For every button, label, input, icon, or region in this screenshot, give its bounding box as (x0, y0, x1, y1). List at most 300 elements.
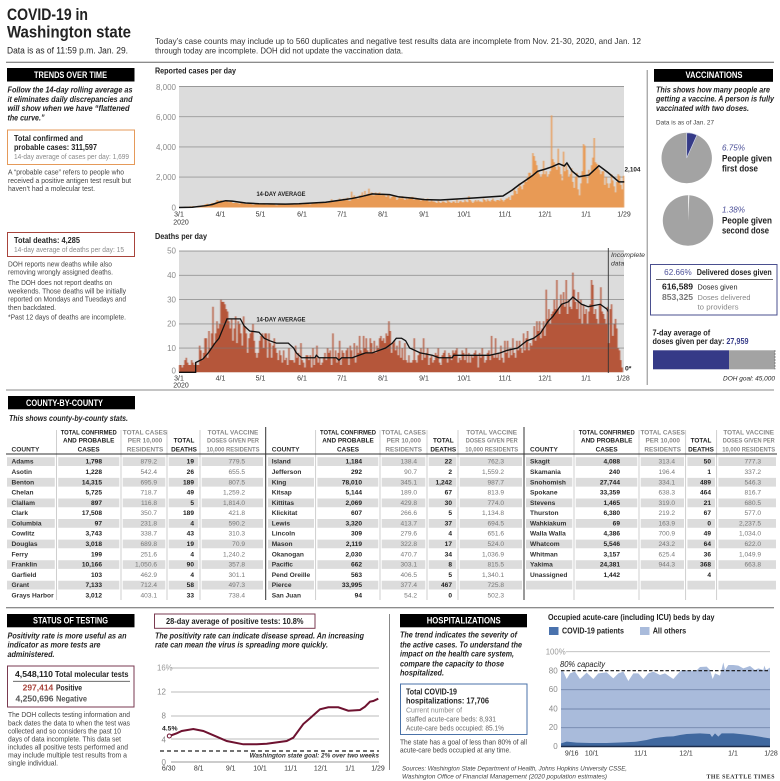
table rows: San Juan (272, 592, 301, 600)
table header: COUNTY (530, 446, 558, 453)
y axis: beds: 40 (549, 704, 558, 713)
table rows: Skagit (530, 459, 551, 466)
table header: TOTAL CONFIRMED (579, 430, 635, 437)
table rows: 651.6 (487, 531, 504, 538)
table rows: 470.7 (400, 551, 417, 558)
callout: total deaths (8, 232, 134, 256)
table rows: 319.0 (658, 500, 675, 507)
table rows: 725.8 (487, 582, 504, 589)
title: Washington state (7, 24, 131, 42)
table rows: 14,315 (82, 479, 102, 486)
heading: trends over time: TRENDS OVER TIME (34, 70, 107, 80)
callout: delivered doses: Doses delivered (698, 293, 750, 302)
note: capacity goal (400, 738, 527, 755)
pie: second dose (663, 195, 713, 246)
y axis: deaths: 10 (167, 344, 177, 353)
table rows: 1,242 (435, 479, 452, 486)
callout: total cases: probable cases: 311,597 (14, 143, 97, 152)
table rows: 1,034.0 (739, 531, 761, 538)
y axis: beds: 20 (549, 723, 558, 732)
table rows: 2,119 (346, 541, 362, 548)
label: second dose: 1.38% (722, 206, 745, 215)
table rows: 1,340.1 (482, 572, 504, 579)
capacity line (561, 670, 770, 672)
table rows: 64 (704, 541, 711, 548)
top note: through today are incomplete. DOH did not update the vaccination data. (155, 46, 403, 56)
table header: TOTAL CASES (123, 430, 168, 437)
chart title: cases: Reported cases per day (155, 66, 236, 76)
table rows: 5,144 (345, 490, 362, 497)
x axis: positivity: 8/1 (194, 766, 204, 773)
heading: county-by-county (8, 396, 135, 409)
table header: PER 10,000 (645, 438, 680, 445)
table rows: Spokane (530, 490, 558, 497)
table rows: 292 (351, 469, 362, 476)
y axis: cases: 8,000 (156, 83, 177, 92)
table rows: 309 (351, 531, 362, 538)
table rows: 27,744 (600, 479, 620, 486)
positivity description (155, 631, 364, 650)
table rows: 4 (448, 531, 452, 538)
table rows: 310.3 (228, 531, 245, 538)
table rows: 1,559.2 (482, 469, 504, 476)
label: first dose: People given (722, 154, 772, 164)
table rows: Walla Walla (530, 531, 566, 538)
table rows: 700.9 (658, 531, 675, 538)
table rows: 577.0 (744, 510, 761, 517)
label: 7-day doses average (652, 329, 749, 346)
y axis: positivity: 16% (157, 664, 173, 673)
table rows (272, 459, 504, 600)
y axis: deaths (167, 247, 177, 376)
x axis: positivity: 11/1 (284, 766, 297, 773)
table rows: 5,546 (603, 541, 620, 548)
data date: Data is as of Jan. 27 (656, 119, 714, 126)
table header: TOTAL (174, 438, 194, 445)
table rows: 1,050.6 (135, 562, 157, 569)
table rows: 1,465 (603, 500, 620, 507)
table rows: 680.5 (744, 500, 761, 507)
table rows: 4 (190, 551, 194, 558)
table rows: Lewis (272, 520, 290, 528)
table rows: 813.9 (487, 490, 504, 497)
table rows: 33,995 (342, 582, 362, 589)
label: first dose: 6.75% (722, 144, 745, 153)
table rows: 542.4 (140, 469, 157, 476)
table rows: 231.8 (140, 520, 157, 528)
table rows: 816.7 (744, 490, 761, 497)
x axis: deaths: 10/1 (457, 376, 471, 383)
table rows: 694.5 (487, 520, 504, 528)
label: second dose (722, 206, 772, 235)
heading: hospitalizations (400, 614, 527, 627)
label: 7-day doses average: 7-day average of (652, 329, 711, 338)
table rows: 777.3 (744, 459, 761, 466)
table rows: 879.2 (140, 459, 157, 466)
table rows: 429.8 (400, 500, 417, 507)
intro text: the curve.” (8, 114, 45, 122)
callout: total hospitalizations: Acute-care beds occupied: 85.1% (406, 725, 504, 732)
table rows: 334.1 (658, 479, 675, 486)
progress bar: doses vs goal (653, 350, 775, 369)
y axis: positivity: 4 (162, 735, 167, 744)
heading: status of testing (7, 614, 134, 627)
table rows: Stevens (530, 500, 556, 507)
table rows: 944.3 (658, 562, 675, 569)
y axis: deaths: 0 (172, 366, 177, 376)
table rows: 17,508 (82, 510, 102, 517)
x axis: cases: 7/1 (337, 212, 347, 219)
intro text (8, 86, 133, 122)
callout: delivered doses: Delivered doses given (697, 268, 772, 277)
y axis: deaths: 40 (167, 271, 177, 280)
table rows: 240 (609, 469, 620, 476)
table: counties Island to San Juan (272, 430, 519, 600)
x axis: beds: 1/1 (728, 750, 738, 757)
table rows: 1,184 (345, 459, 362, 466)
table rows: 368 (700, 562, 711, 569)
table rows: 50 (704, 459, 711, 466)
table rows: 1,240.2 (223, 551, 245, 558)
table rows: 219.2 (658, 510, 675, 517)
table rows: 607 (351, 510, 362, 517)
note: test data: includes all positive tests performed and (8, 742, 128, 751)
callout: molecular tests: Positive (56, 684, 83, 693)
table header (12, 430, 260, 453)
table header: TOTAL CASES (641, 430, 686, 437)
table rows: 357.8 (228, 562, 245, 569)
table rows: 22 (445, 459, 452, 466)
panel: vaccinations (650, 69, 777, 383)
label: latest deaths value: 0* (625, 366, 632, 373)
x axis: positivity: 9/1 (226, 766, 236, 773)
annotation: incomplete data: data (611, 261, 624, 268)
table rows: 199 (91, 551, 102, 558)
intro text: indicator as more tests are (8, 640, 101, 650)
table rows: 1,049.9 (739, 551, 761, 558)
table rows: 97 (95, 520, 102, 528)
x axis: positivity: 6/30 (162, 766, 176, 773)
table header: PER 10,000 (128, 438, 163, 445)
table header: CASES (78, 446, 100, 453)
table rows: 638.3 (658, 490, 675, 497)
table header: AND PROBABLE (63, 438, 115, 445)
intro text (400, 631, 522, 677)
table header: TOTAL (691, 438, 711, 445)
table header: DEATHS (688, 446, 715, 453)
chart: reported cases per day (155, 66, 641, 227)
table background bands (6, 427, 777, 600)
table rows: 7,133 (85, 582, 102, 589)
table rows: 464 (700, 490, 711, 497)
line: deaths 14-day average (179, 297, 608, 372)
table rows: 21 (704, 500, 711, 507)
y axis: beds (546, 647, 566, 751)
y axis: deaths: 50 (167, 247, 177, 256)
table rows: Ferry (12, 551, 28, 558)
x axis: beds: 12/1 (679, 750, 693, 757)
y axis: beds: 80 (549, 666, 558, 675)
capacity label: 80% capacity (560, 660, 606, 669)
note: probable case: haven’t had a molecular test. (8, 184, 95, 193)
bars: daily cases (179, 115, 624, 208)
callout: total hospitalizations: hospitalizations: 17,706 (406, 697, 490, 706)
x axis: deaths: 9/1 (419, 376, 429, 383)
intro text: the active cases. To understand the (400, 640, 522, 649)
table rows: 662 (351, 562, 362, 569)
positivity description: The positivity rate can indicate disease spread. An increasing (155, 631, 364, 640)
callout: total cases: Total confirmed and (14, 134, 83, 143)
plot background: deaths (179, 251, 624, 372)
table rows: 279.6 (400, 531, 417, 538)
table rows: Lincoln (272, 531, 295, 538)
table rows: 5 (190, 500, 194, 507)
table rows: 54.2 (404, 592, 417, 600)
x axis: deaths: 12/1 (538, 376, 552, 383)
table header: TOTAL (433, 438, 454, 445)
callout: total cases: 14-day average of cases per day: 1,699 (14, 154, 129, 161)
x axis: deaths: 5/1 (256, 376, 265, 383)
table rows: 5,725 (85, 490, 102, 497)
table rows: 26 (187, 469, 194, 476)
intro text: administered. (8, 650, 54, 659)
label: first dose (722, 144, 772, 174)
table rows: 762.3 (487, 459, 504, 466)
table rows: Asotin (12, 469, 32, 476)
table rows: 116.8 (141, 500, 157, 507)
callout: total hospitalizations: staffed acute-care beds: 8,931 (406, 716, 496, 723)
table header: DEATHS (171, 446, 198, 453)
table rows: Skamania (530, 469, 561, 476)
table rows: 467 (441, 582, 452, 589)
note: test data: single individual. (8, 759, 58, 768)
y axis: positivity: 12 (157, 688, 167, 697)
intro text: This shows county-by-county stats. (9, 414, 128, 423)
table rows: 590.2 (228, 520, 245, 528)
table rows: Whatcom (530, 541, 560, 548)
y axis: positivity: 8 (162, 712, 167, 720)
table rows: 303.1 (400, 562, 417, 569)
table rows: 189.0 (400, 490, 417, 497)
table header: 10,000 RESIDENTS (722, 446, 776, 453)
x axis: cases: 1/1 (581, 212, 591, 219)
table rows: 774.0 (487, 500, 504, 507)
table rows: 421.8 (228, 510, 245, 517)
table header: COUNTY (12, 446, 40, 453)
table rows: Jefferson (272, 469, 301, 476)
table rows: 24,381 (600, 562, 620, 569)
note: deaths reporting (7, 259, 126, 322)
intro text: impact on the health care system, (400, 650, 514, 659)
pie: first dose (662, 133, 712, 183)
table rows: Pierce (272, 582, 292, 589)
table rows: 489 (700, 479, 711, 486)
table rows: Columbia (12, 520, 42, 528)
table rows: 1,228 (85, 469, 102, 476)
table rows: 4,088 (603, 459, 620, 466)
callout: molecular tests: Negative (56, 694, 88, 703)
note: deaths reporting: *Past 12 days of deaths are incomplete. (8, 313, 126, 322)
table rows: Chelan (12, 490, 33, 497)
note: test data: collected and so considers the past 10 (8, 726, 121, 735)
line: cases 14-day average (179, 163, 624, 208)
table rows: Klickitat (272, 510, 298, 517)
table rows: 138.4 (400, 459, 417, 466)
x axis: positivity (162, 766, 385, 773)
table rows: Garfield (12, 572, 36, 579)
table rows: 163.9 (658, 520, 675, 528)
intro text: Follow the 14-day rolling average as (8, 86, 133, 94)
x axis: deaths: 2020 (173, 382, 189, 390)
callout: 28-day positive average (154, 614, 315, 628)
note: deaths reporting: The DOH does not report deaths on (8, 278, 112, 287)
note: probable case (8, 168, 131, 193)
intro text: vaccinated with two doses. (656, 104, 749, 113)
table rows: 2 (448, 469, 452, 476)
table header: CASES (596, 446, 618, 453)
table rows: 1 (707, 469, 711, 476)
table rows: 815.5 (487, 562, 504, 569)
x axis: beds (565, 750, 778, 757)
table rows: 1,259.2 (223, 490, 245, 497)
table header: AND PROBABLE (322, 438, 374, 445)
table rows: 196.4 (658, 469, 675, 476)
callout: delivered doses: 62.66% (664, 268, 692, 277)
table header: TOTAL CONFIRMED (320, 430, 376, 437)
label: latest cases value: 2,104 (624, 167, 641, 174)
table rows: 338.7 (140, 531, 157, 538)
y axis: deaths: 30 (167, 296, 177, 305)
table header: COUNTY (272, 446, 300, 453)
callout: molecular tests (8, 666, 134, 707)
table rows: 406.5 (400, 572, 417, 579)
callout: delivered doses (650, 264, 777, 315)
table rows: 266.6 (400, 510, 417, 517)
positivity description: rate can mean the virus is spreading more quickly. (155, 641, 328, 650)
table header: DEATHS (430, 446, 457, 453)
y axis: beds: 60 (549, 685, 558, 694)
table rows: 19 (187, 541, 194, 548)
table rows: 251.6 (140, 551, 157, 558)
table rows: 2,237.5 (739, 520, 761, 528)
table rows: 103 (91, 572, 102, 579)
table rows: 1,798 (85, 459, 102, 466)
start label: 4.5% (162, 726, 178, 733)
table rows: 497.3 (228, 582, 245, 589)
title block (7, 6, 641, 56)
table rows: 563 (351, 572, 362, 579)
table rows: Douglas (12, 541, 38, 548)
table header (530, 430, 776, 453)
label: second dose: People given (722, 216, 772, 226)
table rows: 655.5 (228, 469, 245, 476)
table header: PER 10,000 (386, 438, 421, 445)
table rows: 43 (187, 531, 194, 538)
x axis: cases: 11/1 (498, 212, 512, 219)
data date: Data is as of 11:59 p.m. Jan. 29. (7, 46, 128, 56)
heading: hospitalizations: HOSPITALIZATIONS (427, 616, 501, 626)
x axis: cases: 5/1 (256, 212, 265, 219)
table header: 10,000 RESIDENTS (465, 446, 519, 453)
table rows: 90 (187, 562, 194, 569)
table rows: Kitsap (272, 490, 292, 497)
note: deaths reporting: then backdated. (8, 303, 56, 312)
panel: county by county (6, 396, 777, 600)
table rows: Island (272, 459, 291, 466)
x axis: deaths: 11/1 (498, 376, 512, 383)
table rows: Clark (12, 510, 28, 517)
intro text: it eliminates daily discrepancies and (8, 95, 133, 104)
x axis: cases: 6/1 (297, 212, 307, 219)
table rows: Benton (12, 479, 34, 486)
table rows: 377.4 (400, 582, 417, 589)
table rows: 33 (187, 592, 194, 600)
y axis: beds: 100% (546, 647, 566, 656)
callout: molecular tests: 4,548,110 (15, 669, 53, 679)
table header: DOSES GIVEN PER (466, 438, 518, 445)
plot background: cases (179, 86, 624, 208)
table header: CASES (337, 446, 360, 453)
table rows: 403.1 (140, 592, 157, 600)
table rows: 67 (704, 510, 711, 517)
y axis: positivity (157, 664, 173, 767)
table rows: 0 (707, 520, 711, 528)
x axis: deaths: 4/1 (216, 376, 225, 383)
table rows: 625.4 (658, 551, 675, 558)
note: deaths reporting: DOH reports new deaths while also (8, 259, 112, 268)
y axis: deaths: 20 (167, 320, 177, 328)
x axis: positivity: 1/29 (371, 766, 385, 773)
sources: Washington Office of Financial Management (2020 population estimates) (402, 774, 607, 780)
area: COVID-19 patients (561, 733, 770, 747)
callout: total hospitalizations (400, 684, 527, 734)
y axis: beds: 0 (553, 742, 558, 751)
note: deaths reporting: removing wrongly assigned deaths. (8, 268, 113, 277)
top note: Today’s case counts may include up to 560 duplicates and negative test results data are incomplete from Nov. 21-30, 2020, and Jan. 12 (155, 36, 641, 46)
table rows: 3,018 (85, 541, 102, 548)
table rows: 897 (91, 500, 102, 507)
callout: 28-day positive average: 28-day average of positive tests: 10.8% (166, 617, 304, 626)
x axis: deaths: 1/1 (581, 376, 591, 383)
intro text: The trend indicates the severity of (400, 631, 518, 640)
table header: AND PROBABLE (581, 438, 633, 445)
table rows: 36 (704, 551, 711, 558)
table rows: 413.7 (400, 520, 417, 528)
table rows: Thurston (530, 510, 559, 517)
table rows: 70.9 (232, 541, 245, 548)
callout: delivered doses: 616,589 (662, 282, 694, 291)
x axis: deaths: 1/28 (616, 376, 630, 383)
line: positive rate (169, 699, 378, 744)
title: COVID-19 in (7, 6, 88, 24)
x axis: deaths: 6/1 (297, 376, 307, 383)
table rows: 738.4 (228, 592, 245, 600)
table rows: 3,743 (85, 531, 102, 538)
table rows: Whitman (530, 551, 558, 558)
label: first dose: first dose (722, 164, 758, 174)
bars: daily deaths (179, 273, 623, 372)
table rows (530, 459, 761, 579)
x axis: positivity: 12/1 (314, 766, 328, 773)
y axis: cases: 4,000 (156, 143, 177, 152)
heading: vaccinations (654, 69, 773, 82)
table rows: 718.7 (140, 490, 157, 497)
table rows: 807.5 (228, 479, 245, 486)
goal line (160, 750, 379, 752)
table: counties Adams to Grays Harbor (12, 430, 260, 600)
x axis: positivity: 1/1 (345, 766, 355, 773)
table rows: 695.9 (140, 479, 157, 486)
